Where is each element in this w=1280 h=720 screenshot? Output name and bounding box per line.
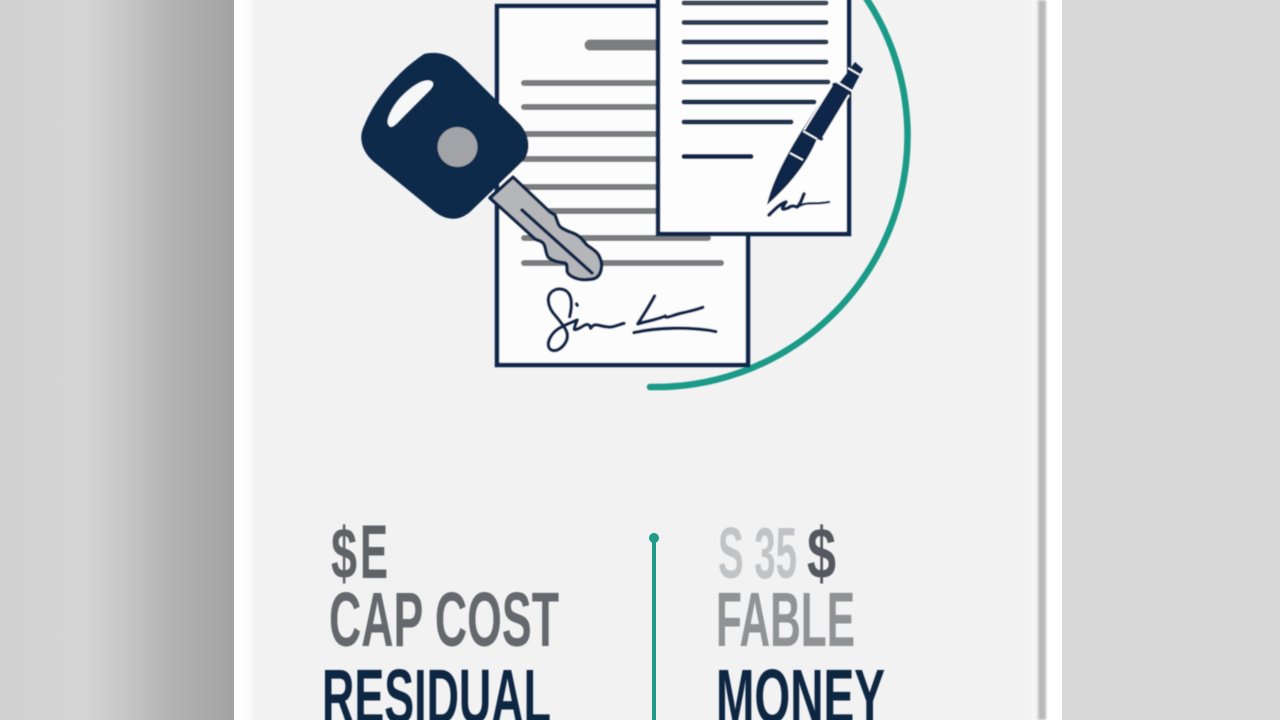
key hole [438, 127, 478, 167]
label: cap cost: CAP COST [329, 577, 559, 663]
icon: car key [361, 53, 602, 280]
poster frame [234, 0, 1062, 720]
document: front page [658, 0, 849, 234]
signature: small [769, 194, 829, 215]
label: fable: FABLE [716, 577, 855, 663]
stats: right column [716, 514, 885, 720]
stats: left column [322, 510, 559, 720]
label: dollar E [331, 510, 388, 595]
document: back lease page [497, 6, 748, 365]
key highlight [388, 80, 433, 127]
icon: pen [767, 62, 863, 205]
label: dollar E: E [360, 510, 388, 595]
key blade [490, 177, 602, 280]
signature: large [548, 289, 716, 351]
teal arc [650, 0, 908, 387]
teal divider with dot [649, 533, 659, 720]
illustration: lease documents, key and pen [361, 0, 908, 387]
label: dollar: $ [807, 514, 836, 594]
key head [361, 53, 529, 219]
label: dollar E: $ [331, 514, 357, 594]
label: faded amount: S 35 [718, 514, 797, 594]
